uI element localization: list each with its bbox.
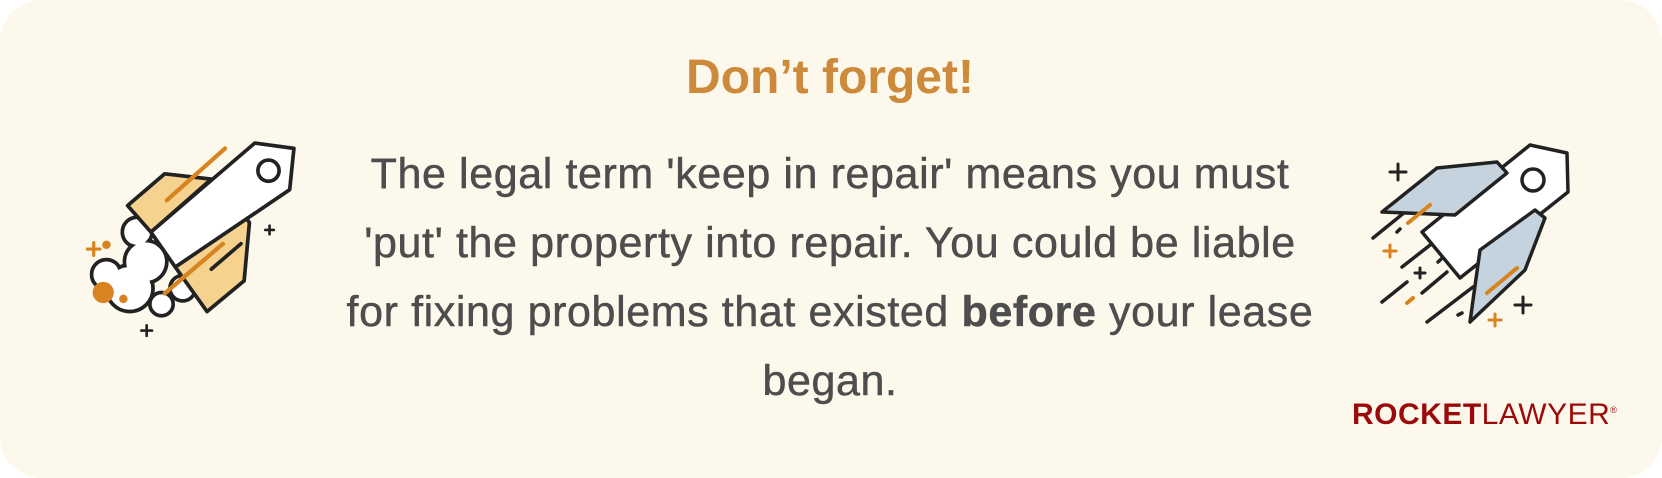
- logo: ROCKETLAWYER®: [1352, 398, 1617, 431]
- title: Don’t forget!: [686, 51, 974, 104]
- body text: 'put' the property into repair. You could be liable: [364, 219, 1296, 267]
- body text: [346, 150, 1313, 405]
- body text: The legal term 'keep in repair' means you must: [371, 150, 1289, 198]
- icon: left rocket: [86, 141, 296, 338]
- body text: began.: [762, 357, 898, 405]
- body text: for fixing problems that existed before your lease: [347, 288, 1313, 336]
